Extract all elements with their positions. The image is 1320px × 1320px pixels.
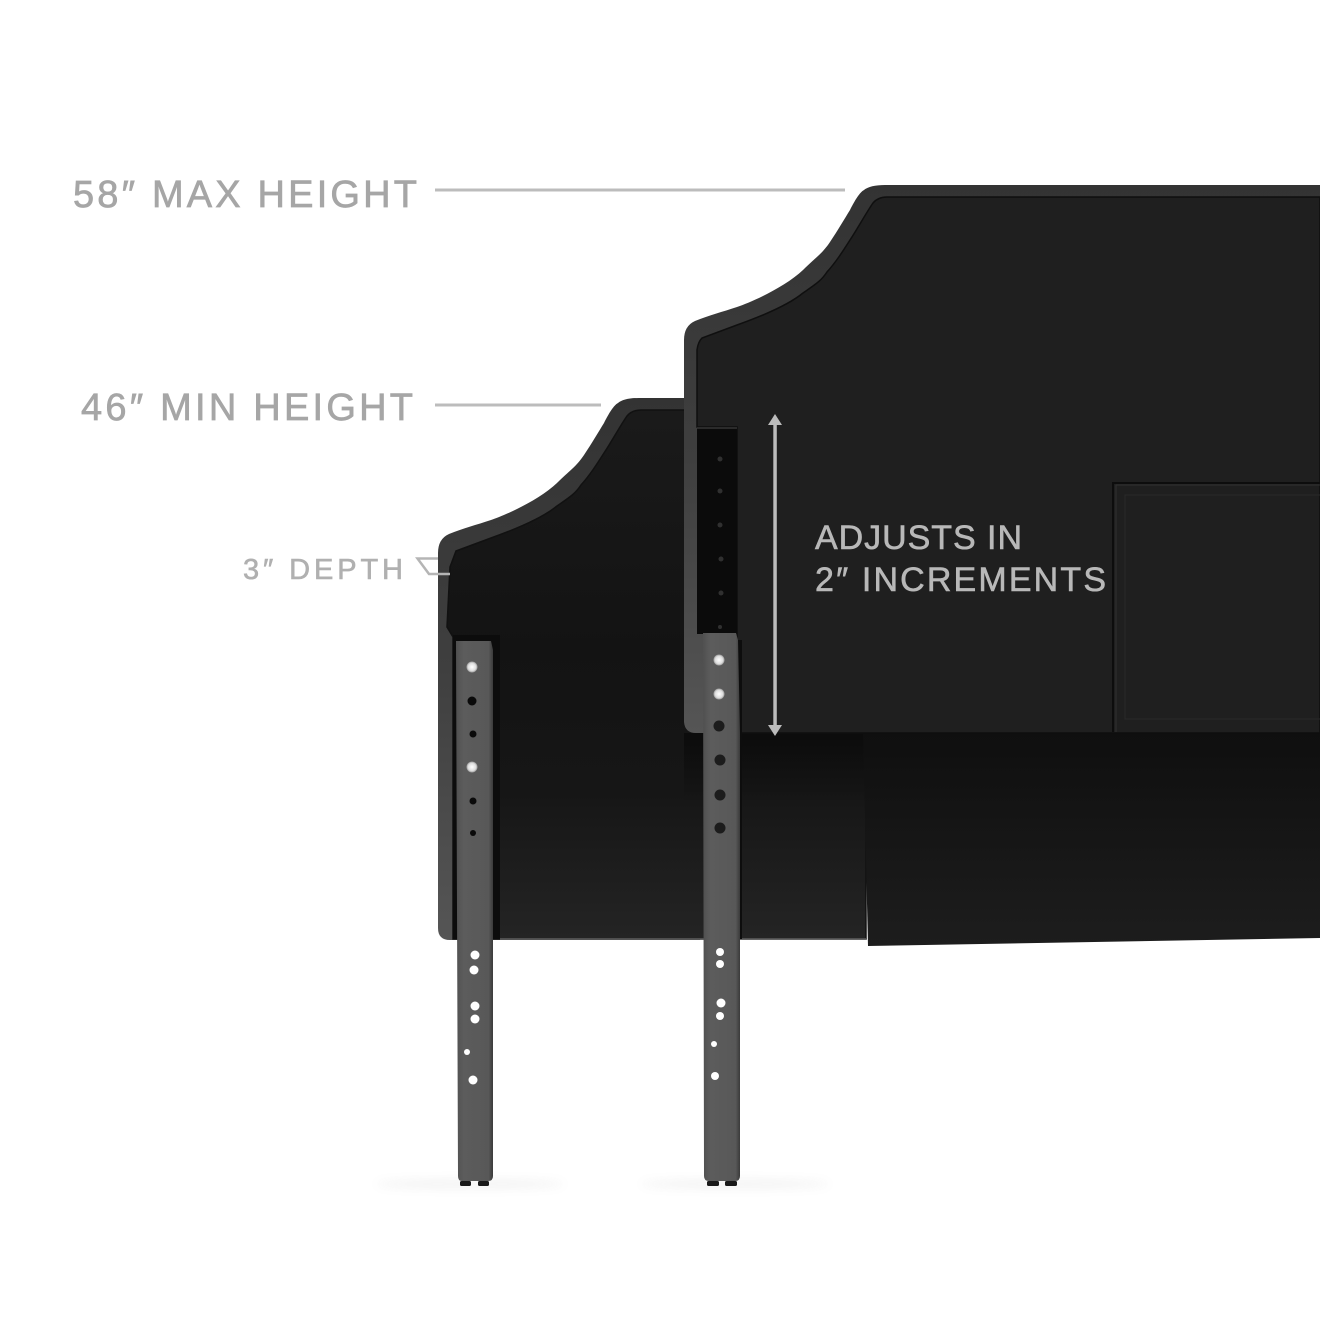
- front headboard at maximum height: [684, 185, 1320, 733]
- stitched pocket: [1113, 483, 1320, 732]
- label: 3 inch depth: 3″ DEPTH: [243, 554, 403, 586]
- front leg slot with holes: [697, 427, 737, 634]
- arrow: adjustment range: [768, 414, 782, 736]
- label: 46 inch min height: 46″ MIN HEIGHT: [81, 387, 413, 429]
- floor shadows: [375, 1180, 830, 1188]
- back headboard leg slot: [453, 635, 500, 939]
- front leg: [703, 633, 742, 1186]
- callout: adjusts in 2 inch increments: 2″ INCREMENTS: [815, 561, 1106, 599]
- label: 58 inch max height: [73, 174, 845, 216]
- lower fabric panel: [684, 733, 1320, 946]
- label: 46 inch min height: [81, 387, 601, 429]
- back leg: [456, 641, 493, 1186]
- label: 58 inch max height: 58″ MAX HEIGHT: [73, 174, 417, 216]
- callout: adjusts in 2 inch increments: ADJUSTS IN: [815, 519, 1022, 557]
- back headboard at minimum height: [438, 398, 866, 940]
- callout: adjusts in 2 inch increments: [815, 519, 1106, 599]
